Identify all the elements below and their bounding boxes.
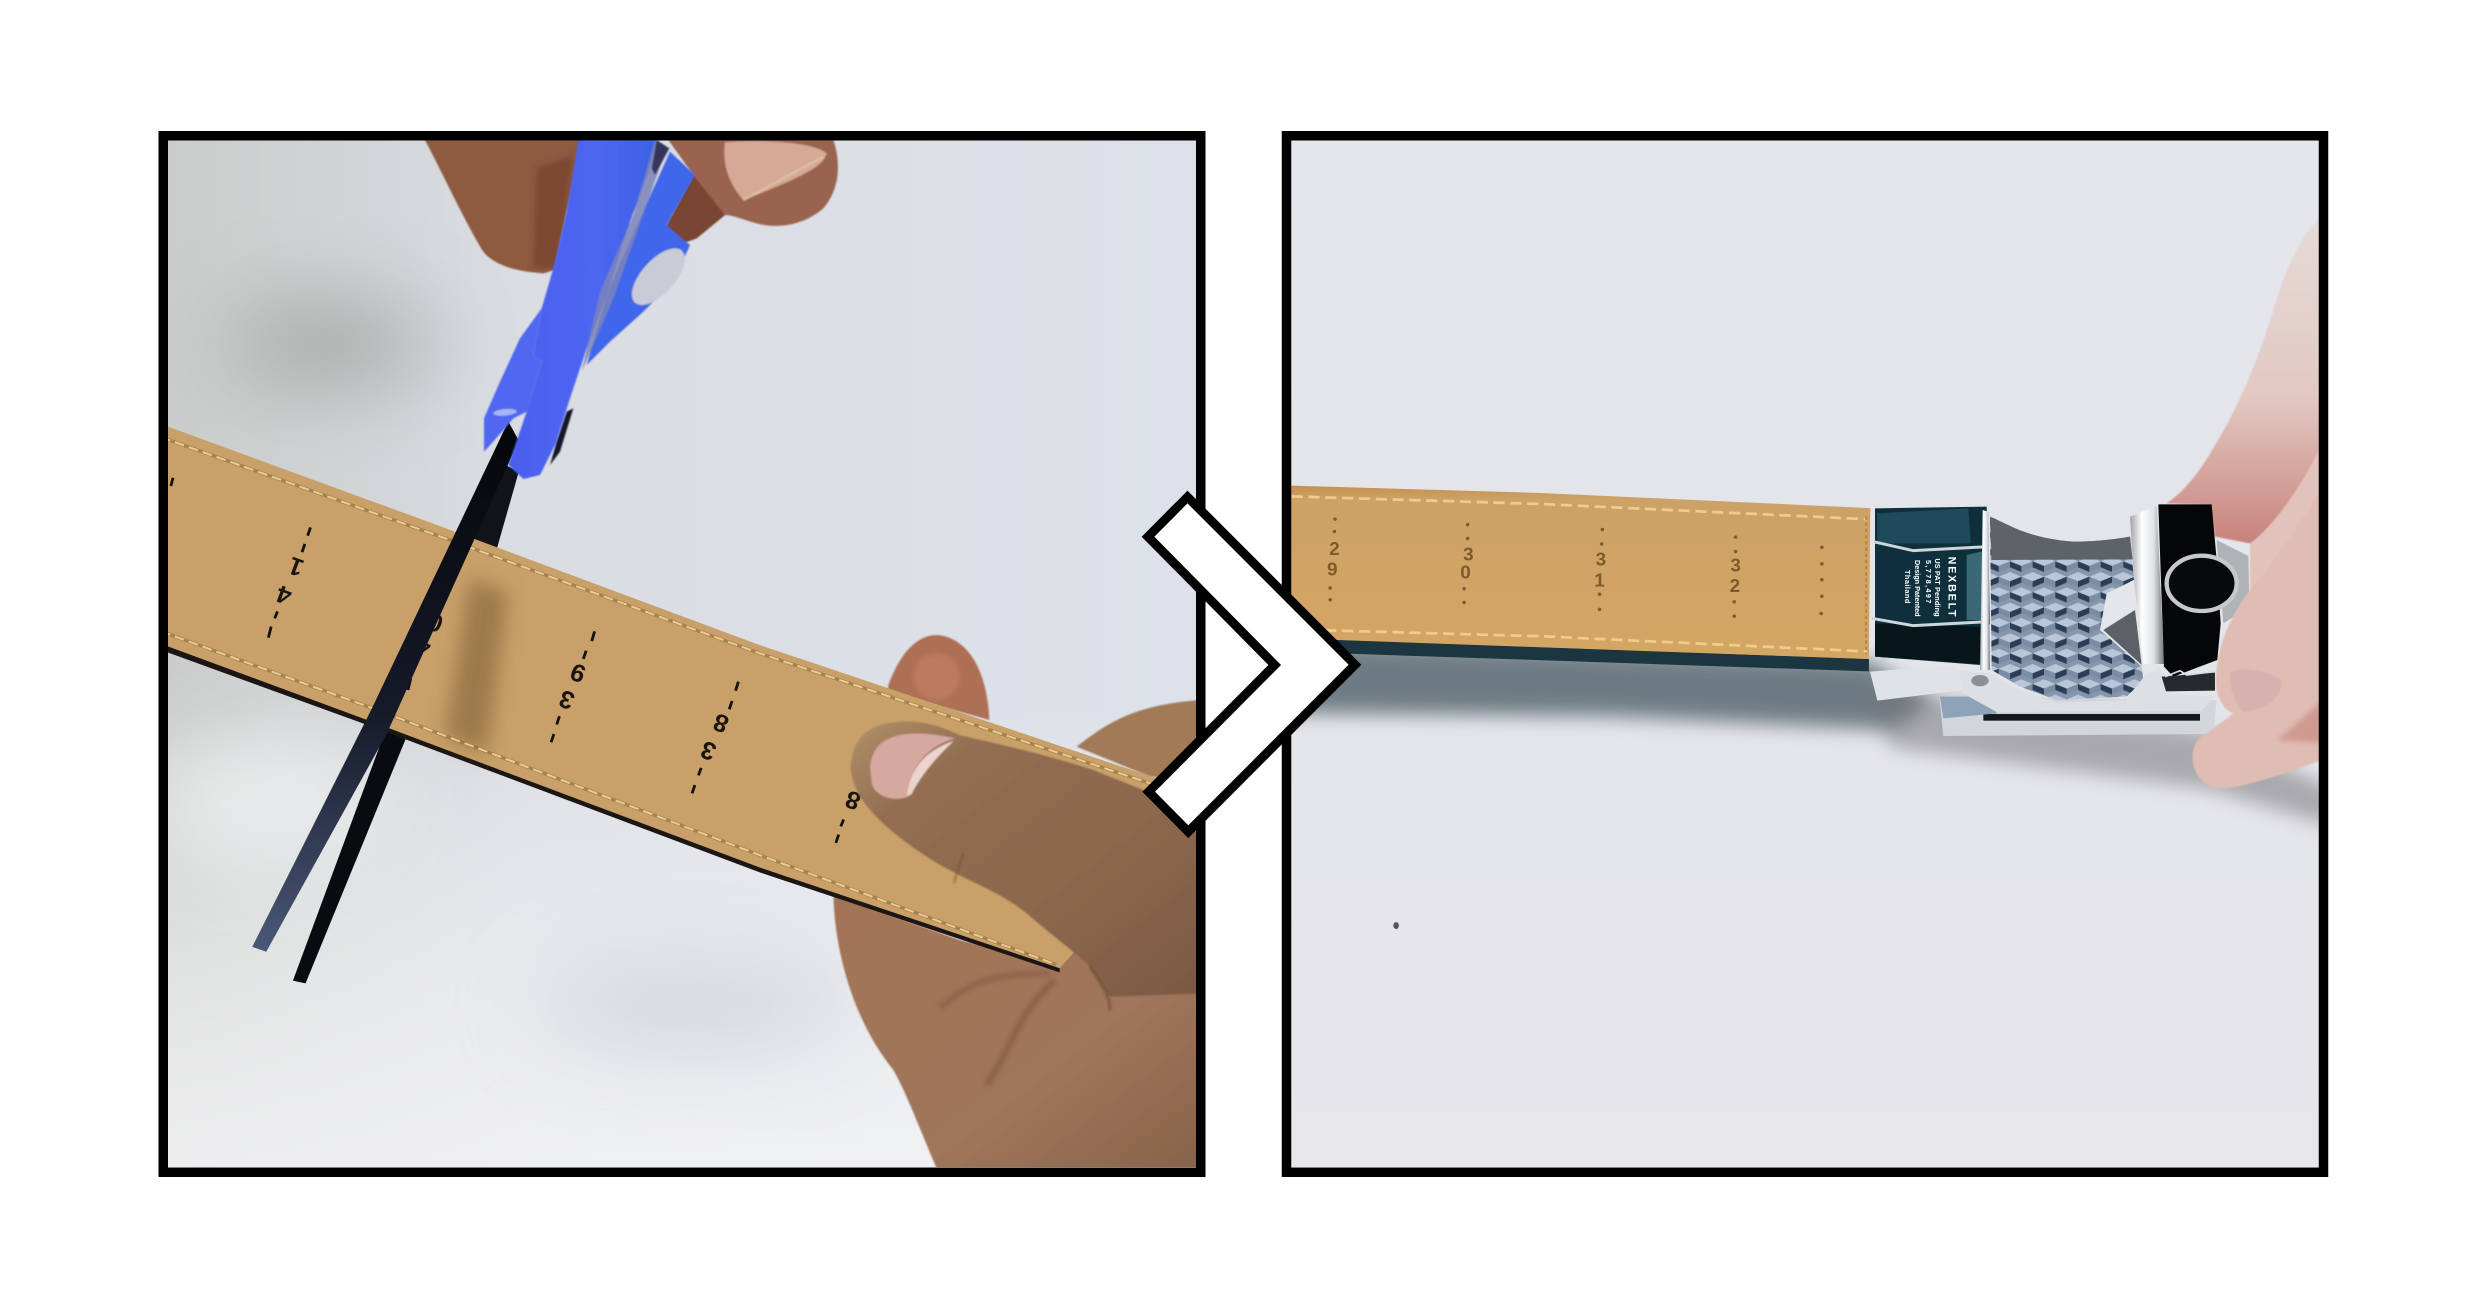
belt size marks: 1 — [285, 551, 308, 582]
shadow under belt — [1281, 640, 1933, 730]
chrome release bar — [2130, 506, 2164, 664]
brand text on clamp: NEXBELT — [1945, 557, 1957, 617]
belt size marks: 9 — [567, 657, 590, 688]
brand text on clamp: 5,778,497 — [1924, 560, 1933, 603]
silver frame — [1957, 667, 2215, 712]
palm of the lower hand — [833, 895, 1203, 1180]
belt size marks: 8 — [842, 784, 865, 815]
belt size marks: 3 — [697, 735, 720, 766]
belt size marks: 2 — [1329, 538, 1340, 559]
back plate of buckle — [1939, 697, 2217, 736]
belt size marks: 4 — [412, 632, 434, 662]
front scissor blade — [252, 421, 519, 952]
ratchet buckle — [1870, 504, 2249, 736]
panel frame, left — [163, 136, 1201, 1172]
belt size marks: 2 — [1730, 575, 1740, 596]
central honeycomb plate — [1990, 517, 2143, 700]
lower fingers in front of buckle — [2192, 590, 2319, 789]
belt size marks — [171, 478, 865, 843]
belt size marks: 3 — [1730, 555, 1741, 575]
black lever block — [2158, 504, 2221, 677]
finger behind the belt and finger at the right edge — [833, 635, 1203, 1180]
shadow under buckle and hand — [1870, 689, 2333, 826]
scissor blade behind the belt — [293, 461, 519, 983]
arrow: chevron pointing from left panel to right panel — [1148, 497, 1355, 832]
belt size marks: 9 — [1327, 559, 1338, 580]
speck on the table — [1393, 922, 1399, 929]
belt size marks: 0 — [1460, 562, 1471, 582]
blue scissor handles — [484, 140, 695, 479]
cut belt strip — [1281, 485, 1870, 671]
hand holding scissors from above — [425, 140, 838, 273]
brand text on clamp: US PAT Pending — [1933, 558, 1942, 617]
panel: belt reattached to the buckle — [1281, 131, 2333, 1185]
brand text on clamp: Thailand — [1903, 570, 1912, 603]
brand text on clamp — [1903, 557, 1957, 617]
belt size marks: 0 — [424, 607, 447, 638]
belt size marks — [1327, 517, 1824, 618]
belt size marks: 3 — [555, 684, 578, 715]
dark clamp block — [1875, 507, 1990, 665]
belt size marks: 1 — [1594, 570, 1605, 591]
belt strip — [161, 424, 1164, 972]
belt size marks: 3 — [1463, 544, 1474, 564]
belt size marks: 3 — [1596, 548, 1606, 569]
belt size marks: 8 — [710, 707, 733, 738]
round release button — [2167, 556, 2237, 611]
panel frame, right — [1286, 136, 2324, 1172]
thumb pressing on the belt — [851, 722, 1203, 1010]
brand text on clamp: Design Patented — [1913, 560, 1922, 617]
upper finger behind buckle — [2166, 218, 2319, 591]
belt size marks: 4 — [273, 579, 296, 610]
panel: cutting the belt with scissors — [147, 131, 1206, 1185]
